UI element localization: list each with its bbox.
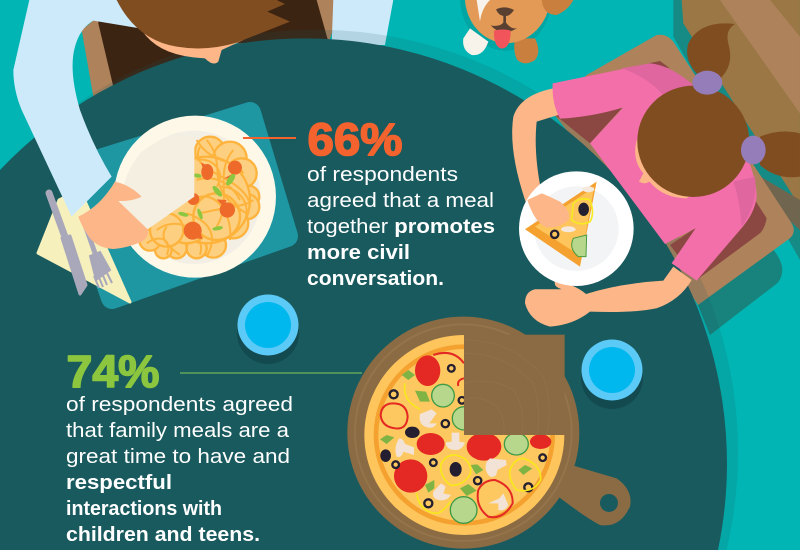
74% description: interactions with — [66, 498, 222, 520]
ear — [542, 0, 573, 15]
board rim — [355, 324, 572, 541]
board handle — [558, 466, 631, 525]
shirt — [553, 63, 757, 281]
near paw — [463, 28, 488, 55]
slice toppings — [551, 186, 594, 257]
sauce — [374, 344, 555, 526]
yellow pepper rings — [404, 383, 541, 513]
face — [142, 30, 243, 64]
lower arm and hand — [525, 267, 692, 327]
plate — [114, 116, 276, 278]
far ponytail — [760, 131, 800, 177]
stat 74% block — [66, 346, 293, 546]
man's chair, torso and far sleeve — [82, 0, 393, 97]
74% connector line — [180, 372, 362, 374]
pizza slice — [525, 182, 597, 267]
napkin — [38, 190, 130, 302]
eaten wedge — [120, 136, 194, 243]
66% connector line — [243, 137, 296, 139]
face — [635, 133, 700, 198]
plate well — [127, 131, 261, 264]
cheese — [378, 349, 550, 521]
66% description: of respondents — [307, 164, 458, 186]
red pepper rings — [381, 353, 513, 517]
hair — [117, 0, 290, 48]
nose and mouth — [491, 7, 517, 33]
arm — [13, 0, 140, 217]
basil on pizza — [380, 370, 532, 496]
66% description — [307, 164, 495, 290]
first drinking cup — [237, 294, 299, 364]
74% description — [66, 394, 293, 546]
far paw — [514, 38, 538, 63]
blaze — [477, 0, 490, 22]
tomatoes — [394, 355, 551, 493]
74% description: that family meals are a — [66, 420, 290, 442]
tongue — [494, 29, 511, 49]
near ponytail — [687, 23, 735, 80]
chair shadow on shirt — [555, 61, 767, 280]
wood grain — [464, 340, 549, 435]
cucumbers — [432, 384, 528, 523]
dog — [460, 0, 573, 63]
74% figure: 74% — [66, 346, 160, 397]
hair tie right — [741, 136, 766, 164]
slice cheese — [535, 187, 594, 257]
stat 66% block — [307, 114, 495, 290]
shirt shading — [622, 63, 756, 227]
knife — [49, 193, 86, 294]
upper arm and hand — [512, 88, 569, 227]
furniture: bench and chair top right — [553, 0, 800, 335]
second drinking cup — [581, 340, 643, 409]
head — [465, 0, 550, 43]
hair tie top — [692, 71, 722, 95]
girl — [512, 23, 800, 327]
pasta — [139, 137, 259, 258]
olives — [380, 427, 462, 477]
66% description: agreed that a meal — [307, 190, 494, 212]
plate — [519, 171, 634, 286]
pizza on wooden board — [347, 317, 631, 549]
olive rings — [390, 365, 546, 507]
shrimp — [184, 161, 242, 240]
66% figure: 66% — [308, 114, 402, 165]
placemat — [68, 113, 287, 298]
hand — [78, 182, 148, 249]
head of hair — [637, 86, 749, 197]
board — [347, 317, 579, 549]
74% description: of respondents agreed — [66, 394, 293, 416]
basil leaves — [178, 172, 237, 231]
girl's plate with pizza slice — [519, 171, 634, 286]
plate well — [534, 186, 619, 271]
fingers on slice — [527, 193, 569, 227]
missing quarter of pizza — [464, 335, 565, 435]
dog shadow — [460, 0, 552, 51]
74% description: children and teens. — [66, 524, 260, 546]
crust — [364, 335, 564, 535]
man: arm, hand, face and hair — [13, 0, 290, 249]
plate of pasta — [114, 116, 276, 278]
66% description: together promotes — [307, 216, 495, 238]
74% description: respectful — [66, 472, 172, 494]
66% description: conversation. — [307, 268, 444, 290]
fork — [82, 216, 112, 288]
mushrooms — [395, 409, 508, 510]
66% description: more civil — [307, 242, 410, 264]
handle hole — [600, 494, 618, 512]
74% description: great time to have and — [66, 446, 290, 468]
